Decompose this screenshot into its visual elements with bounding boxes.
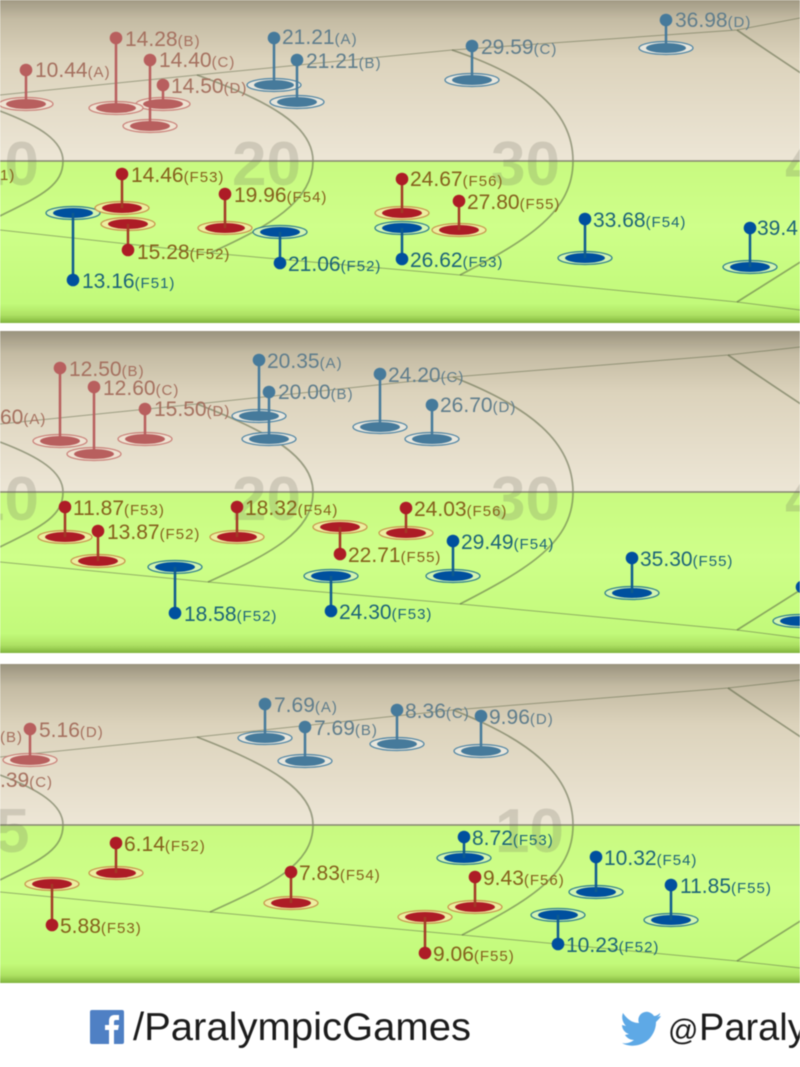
marker: 5.88 F53 (25, 878, 142, 938)
marker: 10.32 F54 (569, 847, 697, 898)
marker: 24.20 C: 24.20(C) (388, 364, 464, 387)
marker: 12.60 C: 12.60(C) (103, 377, 179, 400)
marker: 8.72 F53 (437, 827, 554, 864)
marker: 20.00 B (242, 381, 354, 446)
marker: 8.72 F53: 8.72(F53) (472, 827, 554, 850)
axis numbers (0, 465, 800, 534)
marker: 7.69 A (238, 694, 338, 744)
marker: 21.21 B: 21.21(B) (306, 50, 382, 73)
marker: 20.35 A (232, 350, 343, 422)
marker: 9.06 F55 (398, 910, 515, 966)
axis numbers: 10 (495, 797, 564, 866)
marker: 5.16 D (3, 719, 104, 766)
marker: 36.98 D (639, 9, 751, 54)
marker: 7.83 F54: 7.83(F54) (299, 862, 381, 885)
partial labels: B and C: .39(C) (0, 769, 53, 792)
marker: 10.44 A (0, 59, 111, 110)
marker: 18.32 F54 (210, 497, 338, 544)
marker: 7.69 B: 7.69(B) (314, 717, 378, 740)
marker: 14.40 C: 14.40(C) (159, 49, 235, 72)
partial labels: B and C (0, 729, 53, 792)
marker: 8.36 C: 8.36(C) (405, 700, 470, 723)
marker: 10.32 F54: 10.32(F54) (604, 847, 697, 870)
marker: 21.06 F52: 21.06(F52) (288, 253, 381, 276)
marker: 20.00 B: 20.00(B) (278, 381, 354, 404)
marker: 8.36 C (370, 700, 470, 750)
marker: 18.58 F52: 18.58(F52) (184, 603, 277, 626)
marker: 15.28 F52: 15.28(F52) (137, 241, 230, 264)
marker: 24.67 F56 (375, 168, 503, 220)
marker: 15.50 D (118, 398, 230, 446)
marker: 14.28 B: 14.28(B) (125, 28, 201, 51)
facebook handle: /ParalympicGames (133, 1006, 471, 1049)
panel: bottom results chart (0, 664, 800, 983)
marker: 12.50 B: 12.50(B) (69, 358, 145, 381)
marker: 10.44 A: 10.44(A) (35, 59, 111, 82)
marker: 24.20 C (353, 364, 464, 434)
marker: 11.87 F53: 11.87(F53) (73, 497, 165, 520)
marker: 14.28 B (89, 28, 201, 114)
partial labels: B and C: (B) (0, 729, 23, 746)
axis numbers: 30 (491, 130, 560, 199)
marker: 24.30 F53: 24.30(F53) (339, 601, 432, 624)
marker: 29.59 C (445, 36, 557, 86)
icon: twitter bird (622, 1012, 661, 1046)
marker: 7.69 A: 7.69(A) (274, 694, 338, 717)
marker: 7.83 F54 (264, 862, 381, 910)
partial label: A: 60(A) (0, 406, 46, 429)
marker: 13.16 F51 (46, 206, 175, 293)
marker: 24.03 F56 (379, 498, 507, 540)
marker: 9.06 F55: 9.06(F55) (433, 943, 515, 966)
marker: 13.87 F52 (71, 521, 200, 568)
marker: 33.68 F54: 33.68(F54) (593, 209, 686, 232)
marker: 14.50 D (136, 75, 247, 110)
panel: middle results chart (0, 331, 800, 653)
twitter handle: @ (668, 1014, 698, 1047)
partial label: 1) (0, 167, 15, 184)
marker: 12.50 B (33, 358, 145, 448)
icon: facebook (90, 1010, 124, 1044)
marker: 18.58 F52 (148, 560, 277, 626)
footer: social links (90, 1006, 800, 1049)
marker: 29.49 F54 (426, 531, 554, 582)
marker: 21.21 B (270, 50, 382, 108)
marker: 11.85 F55: 11.85(F55) (680, 875, 772, 898)
marker: 6.14 F52 (89, 833, 206, 880)
marker: 13.16 F51: 13.16(F51) (82, 270, 175, 293)
marker: 29.59 C: 29.59(C) (481, 36, 557, 59)
marker: 14.46 F53: 14.46(F53) (131, 164, 224, 187)
marker: 19.96 F54: 19.96(F54) (234, 184, 327, 207)
marker: 18.32 F54: 18.32(F54) (245, 497, 338, 520)
panel: top results chart (0, 0, 800, 323)
marker: 10.23 F52 (531, 908, 659, 957)
marker: 29.49 F54: 29.49(F54) (461, 531, 554, 554)
marker: 9.96 D: 9.96(D) (489, 706, 554, 729)
marker: 11.85 F55 (644, 875, 772, 926)
marker: 26.62 F53 (375, 222, 503, 272)
marker: 15.28 F52 (101, 218, 230, 264)
marker: 36.98 D: 36.98(D) (675, 9, 751, 32)
marker: 22.71 F55 (313, 520, 441, 567)
marker: 9.43 F56: 9.43(F56) (483, 867, 565, 890)
marker: 26.62 F53: 26.62(F53) (410, 249, 503, 272)
marker: 6.14 F52: 6.14(F52) (124, 833, 206, 856)
marker: 5.16 D: 5.16(D) (39, 719, 104, 742)
marker: 35.30 F55 (605, 548, 733, 600)
marker: 26.70 D (405, 394, 516, 446)
marker: 26.70 D: 26.70(D) (440, 394, 516, 417)
marker: 9.43 F56 (448, 867, 565, 914)
marker: 27.80 F55: 27.80(F55) (467, 191, 560, 214)
axis numbers (0, 797, 564, 866)
marker: 39.4 cut off: 39.4 (757, 217, 798, 240)
marker: 20.35 A: 20.35(A) (267, 350, 343, 373)
marker: 15.50 D: 15.50(D) (154, 398, 230, 421)
axis numbers: 30 (491, 465, 560, 534)
marker: 13.87 F52: 13.87(F52) (107, 521, 200, 544)
axis numbers: 20 (232, 465, 301, 534)
marker: 5.88 F53: 5.88(F53) (60, 915, 142, 938)
axis numbers (0, 130, 800, 199)
marker: cut off at right edge (773, 581, 800, 628)
marker: 21.21 A (247, 26, 358, 92)
marker: 39.4 cut off (723, 217, 798, 274)
marker: 14.50 D: 14.50(D) (171, 75, 247, 98)
marker: 14.40 C (123, 49, 235, 132)
marker: 24.03 F56: 24.03(F56) (414, 498, 507, 521)
marker: 21.21 A: 21.21(A) (282, 26, 358, 49)
marker: 10.23 F52: 10.23(F52) (566, 934, 659, 957)
marker: 35.30 F55: 35.30(F55) (640, 548, 733, 571)
marker: 27.80 F55 (432, 191, 560, 236)
marker: 9.96 D (454, 706, 554, 758)
marker: 33.68 F54 (558, 209, 686, 264)
marker: 24.67 F56: 24.67(F56) (410, 168, 503, 191)
marker: 14.46 F53 (95, 164, 224, 214)
marker: 7.69 B (278, 717, 378, 768)
marker: 12.60 C (67, 377, 179, 460)
marker: 21.06 F52 (253, 226, 381, 276)
marker: 22.71 F55: 22.71(F55) (348, 544, 441, 567)
marker: 19.96 F54 (198, 184, 327, 234)
axis numbers: 20 (232, 130, 301, 199)
marker: 11.87 F53 (38, 497, 165, 544)
marker: 24.30 F53 (304, 570, 432, 624)
